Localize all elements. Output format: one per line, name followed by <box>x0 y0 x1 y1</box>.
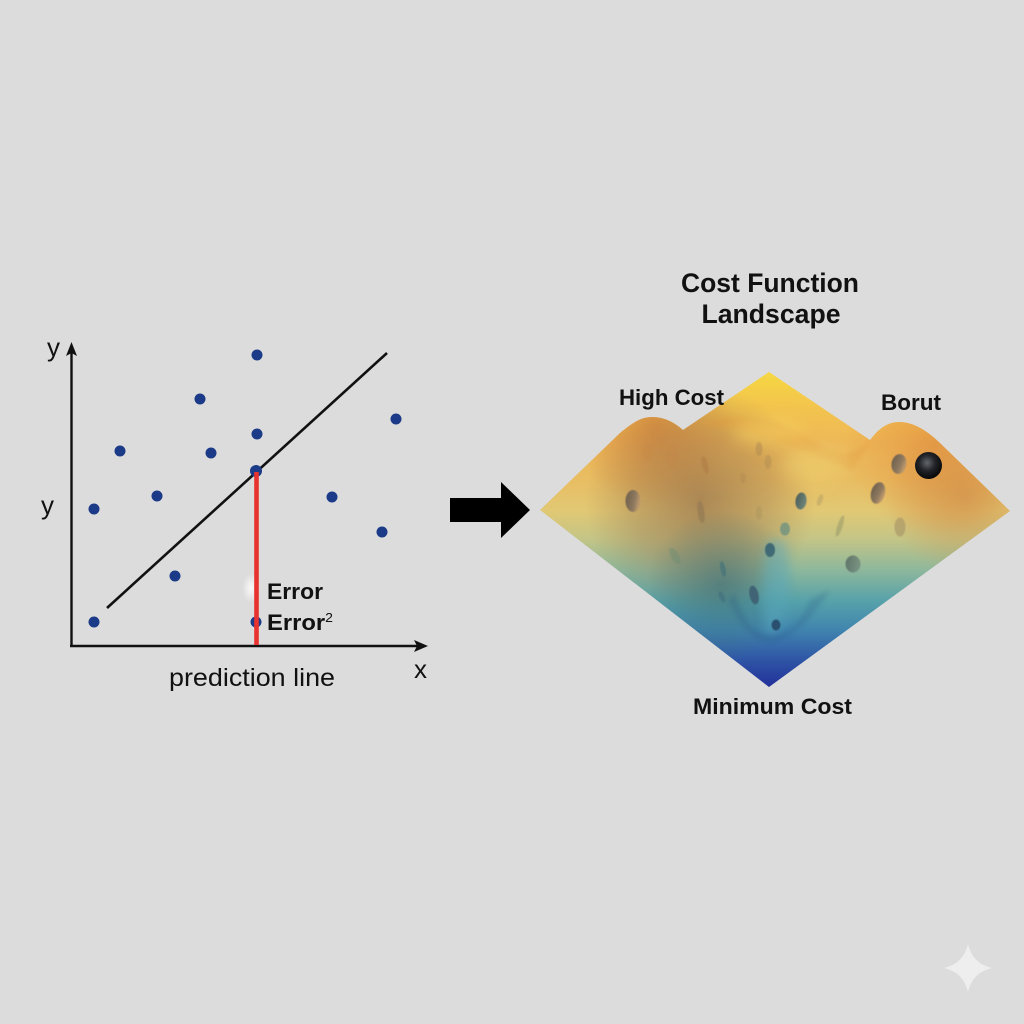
surface shading <box>595 399 1010 642</box>
surface pits <box>626 442 908 630</box>
x axis with arrow <box>70 640 428 652</box>
peak label: Borut <box>881 390 942 415</box>
minimum cost label: Minimum Cost <box>693 694 853 719</box>
title <box>681 268 859 329</box>
panel: regression scatter plot <box>41 332 428 692</box>
x axis caption: prediction line <box>169 664 335 692</box>
title: Landscape <box>702 299 840 329</box>
white glow behind error line <box>242 573 260 603</box>
high cost label: High Cost <box>619 385 725 410</box>
surface shape <box>540 372 1010 687</box>
y axis middle label: y <box>41 490 54 520</box>
data points <box>88 350 402 628</box>
x axis label: x <box>414 654 427 684</box>
error squared label: 2 <box>325 610 333 625</box>
y axis with arrow <box>66 342 77 647</box>
panel: cost surface <box>540 372 1010 687</box>
red error line <box>254 472 259 645</box>
error label: Error <box>267 579 323 604</box>
arrow: from plot to landscape <box>450 482 530 538</box>
ball marker <box>915 452 942 479</box>
error squared label: Error <box>267 610 321 635</box>
prediction line <box>107 353 387 608</box>
icon: sparkle watermark <box>944 944 992 992</box>
y axis top label: y <box>47 332 60 362</box>
title: Cost Function <box>681 268 859 298</box>
